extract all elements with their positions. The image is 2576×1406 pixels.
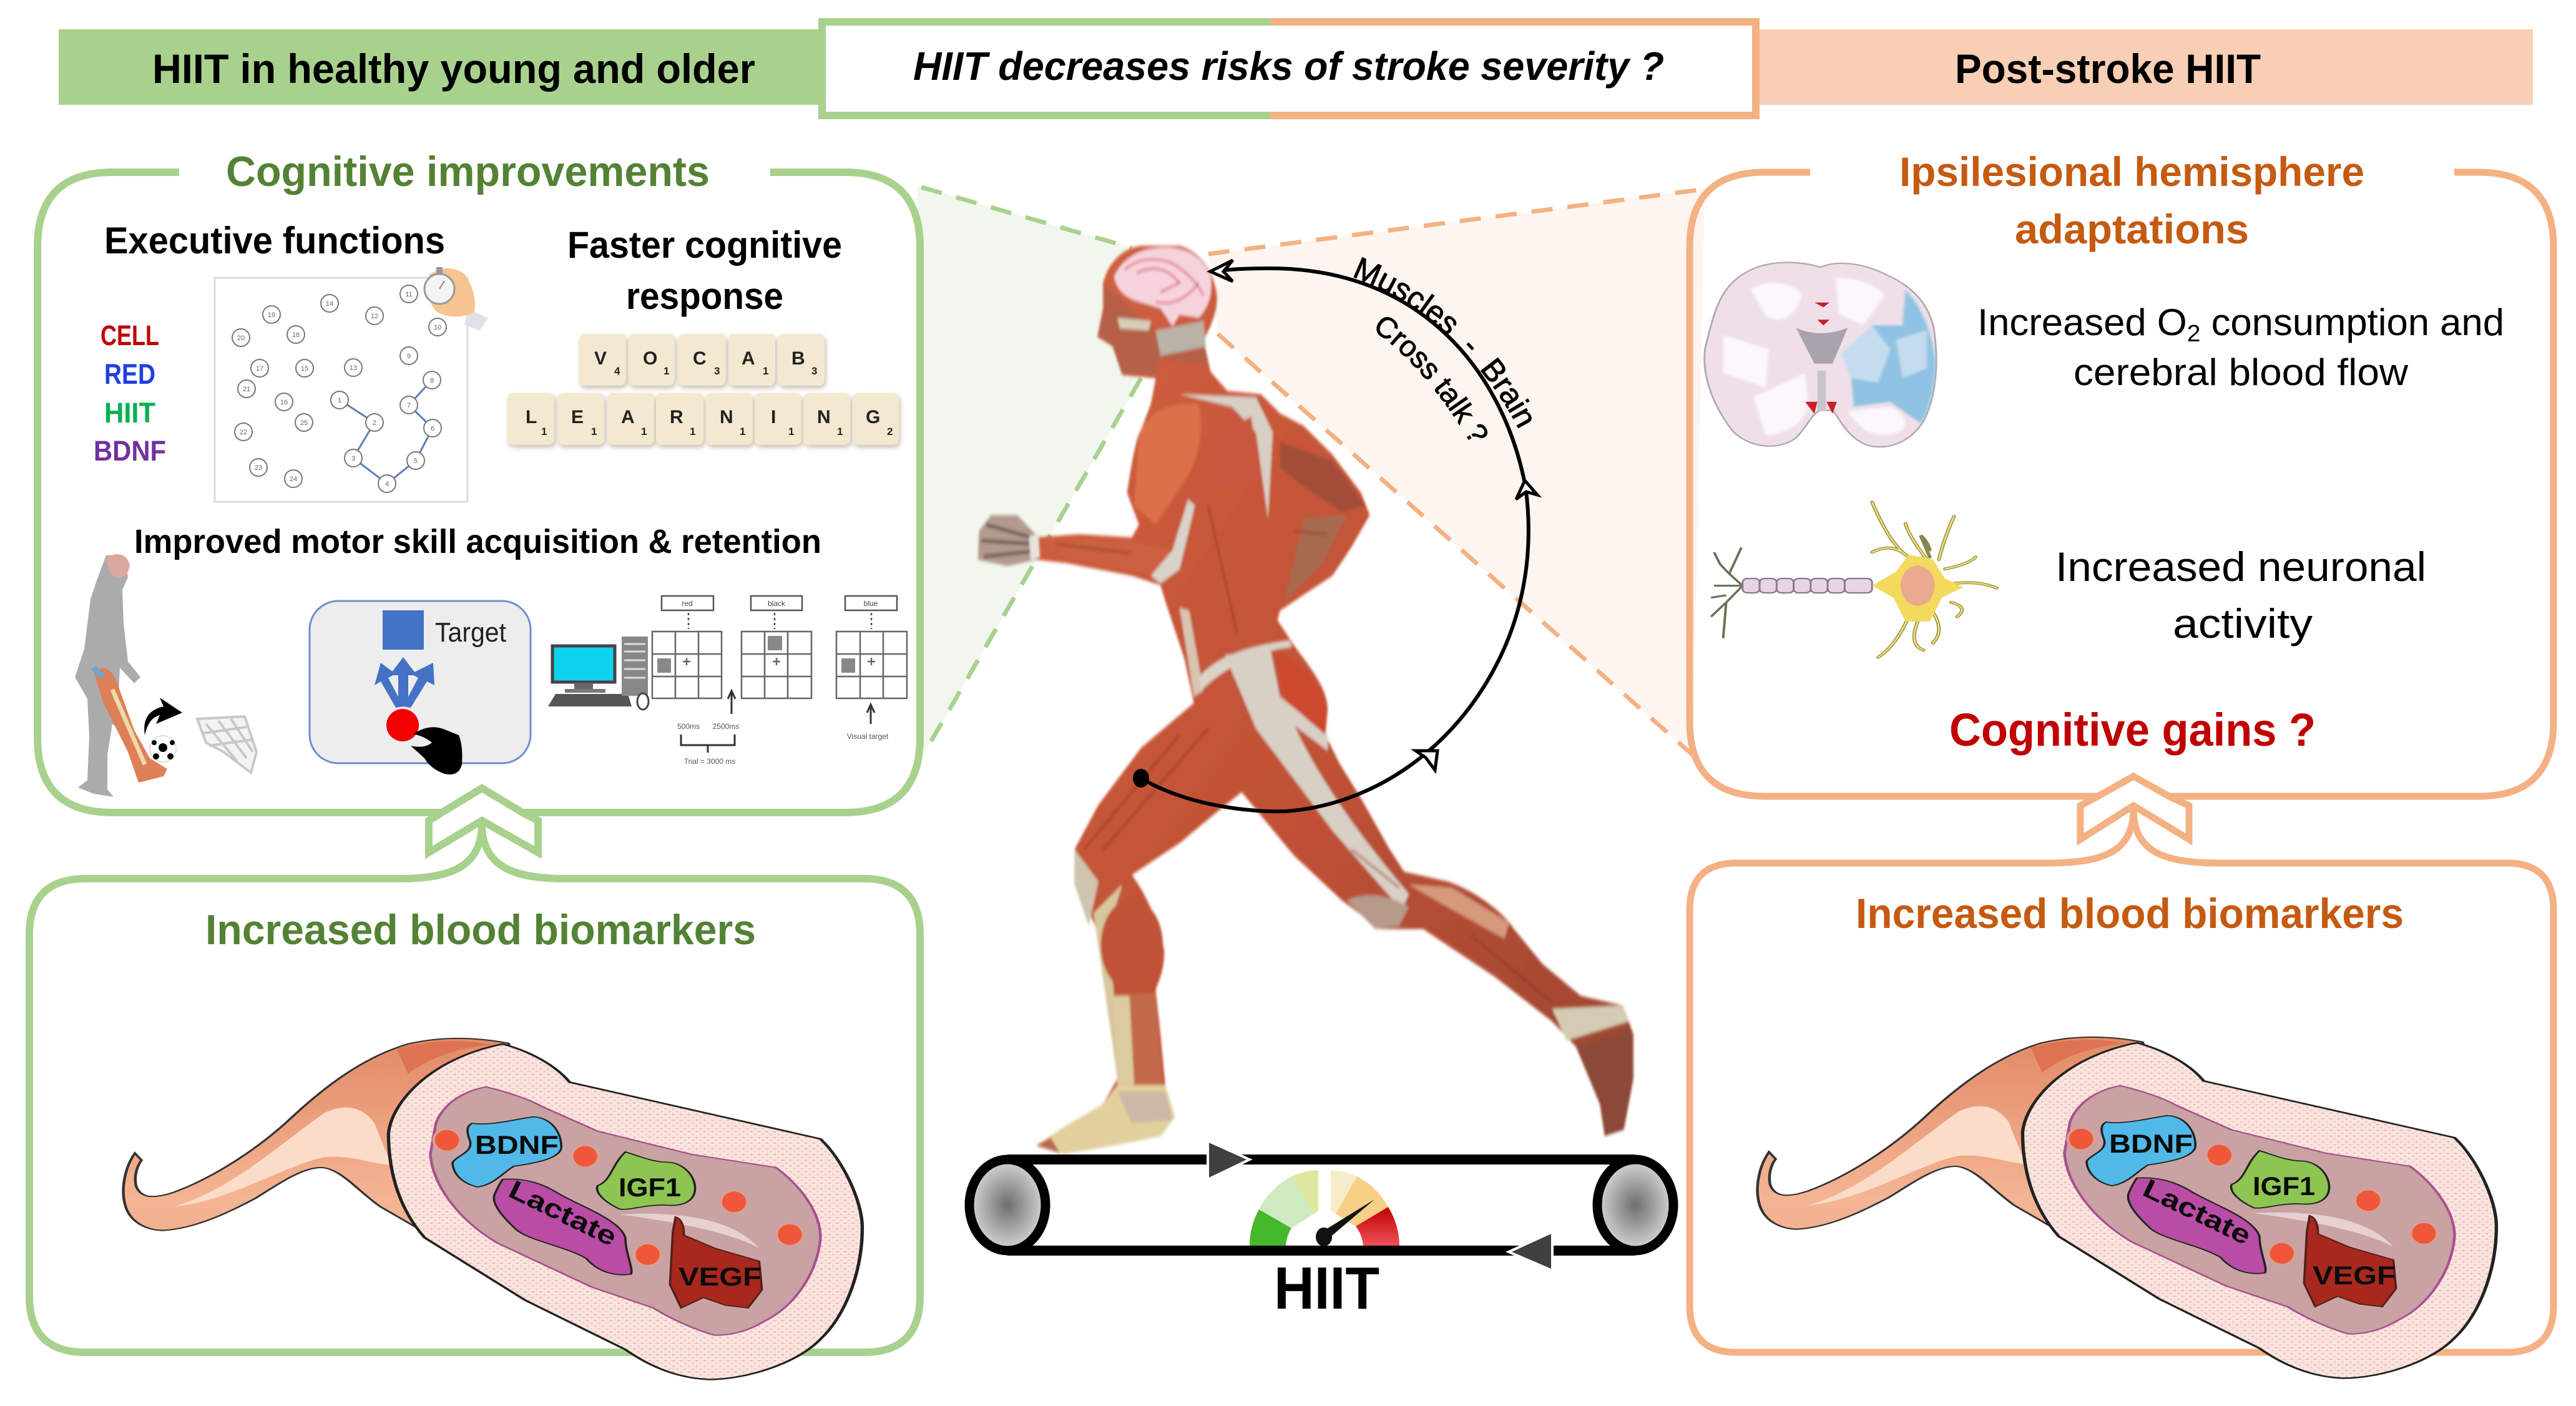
letter tiles: vocab: 4 [614, 365, 620, 377]
stroop words: BDNF [94, 435, 166, 467]
treadmill belt [969, 1141, 1673, 1271]
stroop words: HIIT [104, 397, 155, 429]
trail making test: 2 [373, 419, 376, 427]
icon: intensity gauge [1250, 1170, 1399, 1246]
panel: increased blood biomarkers healthy [29, 824, 920, 1379]
letter tiles: learning: 1 [591, 426, 597, 437]
header: healthy young and older [59, 29, 818, 105]
letter tiles: learning: 1 [690, 426, 695, 437]
arrowhead mid lower [1416, 751, 1437, 770]
panel: increased blood biomarkers post-stroke [1690, 809, 2554, 1378]
trail making test: 24 [290, 476, 297, 483]
blood vessel illustration: BDNF [475, 1130, 559, 1159]
trail making test [215, 278, 468, 502]
blood vessel illustration [124, 1038, 862, 1379]
runner anatomical figure [978, 246, 1633, 1154]
callout: cognitive gains: Cognitive gains ? [1949, 704, 2316, 756]
trail making test: 1 [338, 397, 341, 404]
letter tiles: learning: N [817, 407, 831, 427]
visual cue grids: red [682, 599, 693, 608]
heading: increased blood biomarkers: Increased blood biomarkers [1856, 890, 2404, 937]
heading: executive functions: Executive functions [104, 220, 445, 261]
blood vessel illustration: VEGF [678, 1262, 762, 1291]
wedge: orange zoom from brain to ipsilesional panel [1208, 189, 1705, 755]
blood vessel illustration [1758, 1037, 2496, 1378]
wedge: green zoom from brain to cognitive panel [918, 186, 1141, 754]
letter tiles: learning: G [866, 407, 880, 427]
header: post-stroke HIIT: Post-stroke HIIT [1955, 46, 2261, 92]
trail making test: 18 [292, 331, 300, 339]
heading: motor skill: Improved motor skill acquisition & retention [134, 523, 821, 560]
heading: faster cognitive response: response [626, 275, 783, 317]
text: neuronal activity: activity [2173, 600, 2313, 647]
letter tiles: learning: 1 [837, 426, 843, 437]
icon: curved kick arrow [144, 698, 182, 735]
arrow: muscles-brain cross talk loop [1133, 260, 1537, 811]
panel: ipsilesional hemisphere adaptations [1690, 149, 2554, 796]
blood vessel illustration: Lactate [504, 1174, 622, 1252]
panel heading: cognitive improvements: Cognitive improvements [226, 148, 710, 195]
letter tiles: learning: 1 [541, 426, 547, 437]
trail making test: 17 [256, 365, 263, 373]
letter tiles: learning: I [771, 407, 776, 427]
gauge needle [1321, 1199, 1374, 1239]
muscle lines [1055, 505, 1552, 1002]
trail making test: 19 [268, 311, 275, 319]
rear arm [1280, 442, 1366, 512]
text: neuronal activity [2055, 544, 2426, 647]
timing annotations [677, 691, 889, 766]
glute [1275, 652, 1328, 735]
blood vessel illustration: VEGF [2313, 1261, 2396, 1290]
blood vessel illustration: IGF1 [619, 1173, 681, 1202]
letter tiles: vocab: 1 [664, 365, 669, 377]
panel heading: Ipsilesional hemisphere [1899, 149, 2364, 195]
text: O2 consumption [1977, 301, 2504, 393]
arrowhead to brain [1210, 260, 1233, 281]
trail making test: 13 [350, 364, 357, 372]
visual cue grids: black [768, 599, 786, 608]
timing annotations: Visual target [847, 732, 889, 741]
brain [1114, 248, 1211, 326]
icon: soccer ball [150, 736, 176, 762]
icon: computer [548, 637, 649, 710]
icon: person kicking ball [75, 554, 167, 797]
text: O2 consumption: 2 [2187, 321, 2200, 347]
back tendons [1180, 394, 1273, 519]
muscle origin dot [1133, 769, 1149, 788]
letter tiles: vocab: V [594, 348, 607, 369]
text: neuronal activity: Increased neuronal [2055, 544, 2426, 590]
trail making test: 21 [243, 386, 250, 393]
red start dot [386, 709, 419, 741]
letter tiles: learning: 1 [740, 426, 745, 437]
label: HIIT: HIIT [1274, 1255, 1379, 1322]
timing annotations: 500ms [677, 722, 700, 731]
knee [1347, 896, 1409, 929]
icon: coronal brain section [1705, 263, 1936, 447]
letter tiles: vocab: 3 [811, 365, 817, 377]
arm highlight [1041, 539, 1170, 577]
letter tiles: learning [507, 393, 899, 445]
header: healthy young and older: HIIT in healthy young and older [152, 46, 755, 92]
target label: Target [435, 617, 506, 648]
header: central question: HIIT decreases risks of stroke severity ? [913, 44, 1664, 89]
letter tiles: vocab [579, 334, 825, 386]
arrowhead mid upper [1516, 481, 1537, 499]
panel heading: adaptations [2015, 206, 2249, 252]
heading: faster cognitive response [567, 224, 842, 317]
front foot [1036, 1085, 1175, 1154]
letter tiles: vocab: A [742, 348, 755, 369]
deltoid and chest [1134, 404, 1201, 525]
target reaching task [310, 601, 531, 774]
target square [383, 610, 424, 650]
blood vessel illustration: IGF1 [2253, 1171, 2315, 1201]
letter tiles: learning: L [526, 407, 537, 427]
trail making test: 4 [385, 481, 389, 488]
trail making test: 5 [414, 457, 418, 465]
trail making test: 10 [434, 324, 441, 331]
blue arrows [375, 657, 434, 708]
arrow: green chevron between panels [429, 813, 538, 852]
trail making test: 8 [430, 377, 434, 384]
stroop words [94, 320, 166, 467]
belt arrow forward [1208, 1141, 1250, 1179]
trail making test: 12 [371, 313, 378, 320]
letter tiles: learning: 2 [887, 426, 893, 437]
letter tiles: learning: 1 [788, 426, 794, 437]
blood vessel illustration: BDNF [2109, 1129, 2193, 1158]
heading: increased blood biomarkers: Increased blood biomarkers [205, 906, 756, 954]
label: cross talk: Cross talk ? [1376, 317, 1488, 440]
text: O2 consumption: Increased O [1977, 301, 2182, 343]
letter tiles: learning: R [670, 407, 683, 427]
letter tiles: learning: A [621, 407, 635, 427]
letter tiles: learning: E [571, 407, 584, 427]
front shin and calf [1074, 849, 1099, 926]
icon: stopwatch in hand [424, 267, 488, 331]
trail making test: 14 [326, 300, 333, 308]
header: central question [822, 22, 1756, 115]
face [1097, 283, 1208, 375]
header: post-stroke HIIT [1760, 29, 2533, 105]
letter tiles: vocab: O [643, 348, 657, 369]
trail making test: 6 [431, 425, 434, 432]
panel heading [1899, 149, 2364, 252]
back muscle [1203, 416, 1261, 490]
stroop words: RED [104, 358, 155, 390]
trail making test: 9 [407, 353, 411, 360]
abdomen [1180, 607, 1203, 696]
trail making test: 22 [240, 429, 247, 436]
belt arrow back [1509, 1232, 1552, 1271]
timing annotations: Trial = 3000 ms [684, 757, 735, 766]
trail making test: 7 [407, 402, 411, 409]
hand fingers [978, 515, 1040, 566]
trail making test: 20 [237, 334, 245, 342]
text: O2 consumption: consumption and [2200, 301, 2504, 343]
panel: cognitive improvements [37, 148, 920, 813]
text: O2 consumption: cerebral blood flow [2074, 351, 2409, 393]
trail making test: 23 [255, 464, 262, 472]
visual cue grids: blue [864, 599, 878, 608]
label: muscles brain: Muscles - Brain [1353, 257, 1532, 428]
stroop words: CELL [100, 320, 159, 351]
arrow: orange chevron between panels [2080, 796, 2189, 839]
trail making test: 11 [405, 291, 413, 298]
trail making test: 15 [301, 365, 308, 373]
letter tiles: vocab: 1 [763, 365, 768, 377]
icon: pinching hand [411, 727, 462, 774]
letter tiles: learning: N [720, 407, 733, 427]
hip band and IT band [1198, 641, 1292, 690]
rear ankle and foot [1552, 1005, 1628, 1040]
icon: neuron [1711, 502, 1997, 657]
blood vessel illustration: Lactate [2138, 1173, 2256, 1251]
heading: faster cognitive response: Faster cognitive [567, 224, 842, 266]
visual cue grids [652, 596, 907, 698]
letter tiles: learning: 1 [641, 426, 647, 437]
timing annotations: 2500ms [713, 722, 739, 731]
trail making test: 16 [280, 399, 288, 406]
trail making test: 25 [300, 419, 308, 427]
letter tiles: vocab: C [693, 348, 707, 369]
icon: goal [197, 716, 257, 773]
letter tiles: vocab: 3 [714, 365, 720, 377]
trail making test: 3 [351, 455, 355, 462]
letter tiles: vocab: B [791, 348, 805, 369]
